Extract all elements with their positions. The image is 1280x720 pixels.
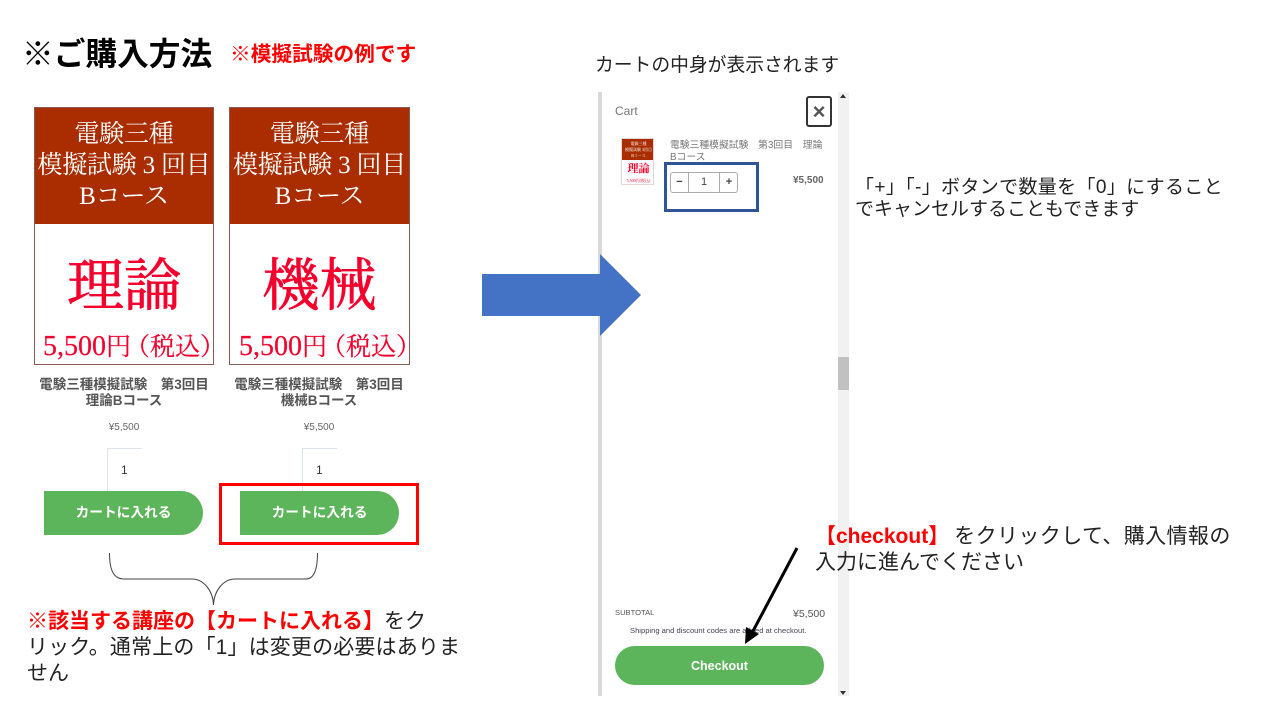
add to cart button: theory [44, 491, 203, 535]
add to cart button: machinery: カートに入れる [272, 505, 367, 520]
close button: × [813, 99, 825, 124]
product card: machinery: 電験三種 [270, 121, 369, 148]
instruction text: add to cart [27, 610, 460, 685]
product name: theory [39, 377, 209, 408]
title: ※ご購入方法 [22, 36, 212, 72]
cart item name: 電験三種模擬試験 第3回目 理論 [670, 140, 822, 151]
cart thumbnail: 模擬試験 3回目 [625, 147, 652, 152]
note: cancel by setting quantity to zero [855, 177, 1223, 220]
note: click checkout [815, 525, 1231, 574]
quantity stepper: + [726, 176, 732, 188]
black arrow to checkout [745, 547, 798, 644]
instruction text: add to cart: リック。通常上の「1」は変更の必要はありま [27, 636, 460, 659]
checkout button [615, 646, 824, 685]
product card: theory: Bコース [79, 183, 169, 210]
product name: machinery: 機械Bコース [281, 393, 357, 408]
quantity stepper: 1 [701, 176, 707, 188]
cart item name [670, 140, 822, 163]
quantity stepper: − [676, 176, 683, 188]
quantity input: theory [107, 448, 142, 491]
product card: machinery: 機械 [262, 255, 376, 318]
instruction text: add to cart: せん [27, 662, 69, 685]
cart thumbnail: 電験三種 [630, 141, 646, 146]
cart panel [598, 92, 850, 696]
close button [806, 96, 832, 127]
cart thumbnail: 理論 [628, 163, 650, 175]
product name: machinery: 電験三種模擬試験 第3回目 [234, 377, 404, 392]
heading: cart contents: カートの中身が表示されます [595, 54, 839, 75]
note: cancel by setting quantity to zero: でキャンセルすることもできます [855, 199, 1139, 220]
scrollbar thumb [838, 357, 849, 390]
product card: machinery: Bコース [275, 183, 364, 210]
checkout button: Checkout [691, 659, 748, 673]
quantity input: machinery [302, 448, 337, 491]
product card: theory: 電験三種 [74, 121, 174, 148]
shipping note: Shipping and discount codes are added at checkout. [630, 626, 806, 635]
cart thumbnail: Bコース [631, 153, 646, 158]
panel left edge [598, 92, 602, 696]
product card: theory [34, 107, 214, 365]
instruction text: add to cart: ※該当する講座の【カートに入れる】をク [27, 610, 426, 633]
cart item price: ¥5,500 [793, 175, 824, 186]
big blue arrow [482, 254, 641, 336]
cart heading: Cart [615, 104, 638, 118]
scroll up marker [840, 94, 846, 98]
note: click checkout: 【checkout】をクリックして、購入情報の [815, 525, 1231, 548]
subtotal label: SUBTOTAL [615, 608, 654, 617]
curly brace [109, 553, 318, 605]
price: machinery: ¥5,500 [304, 422, 334, 433]
red highlight box [219, 483, 419, 545]
quantity input: machinery: 1 [316, 463, 323, 477]
subtitle: mock exam example note: ※模擬試験の例です [230, 43, 416, 66]
blue highlight box [664, 162, 759, 212]
note: click checkout: 入力に進んでください [815, 551, 1024, 574]
subtotal amount: ¥5,500 [793, 608, 825, 620]
note: cancel by setting quantity to zero: 「+」「-」ボタンで数量を「0」にすること [855, 177, 1223, 198]
add to cart button: machinery [240, 491, 399, 535]
product name: theory: 電験三種模擬試験 第3回目 [39, 377, 209, 392]
cart thumbnail [621, 138, 654, 185]
cart thumbnail: 5,500円(税込) [627, 178, 650, 183]
add to cart button: theory: カートに入れる [76, 505, 171, 520]
quantity input: theory: 1 [121, 463, 128, 477]
product card: theory: 理論 [67, 255, 181, 318]
product card: machinery: 模擬試験 3 回目 [233, 152, 406, 179]
scrollbar [838, 92, 849, 696]
price: theory: ¥5,500 [109, 422, 139, 433]
product card: theory: 模擬試験 3 回目 [37, 152, 211, 179]
scroll down marker [840, 691, 846, 695]
product card: machinery [229, 107, 410, 365]
product name: theory: 理論Bコース [86, 393, 162, 408]
product name: machinery [234, 377, 404, 408]
cart item name: Bコース [670, 152, 705, 163]
quantity stepper [670, 172, 738, 193]
